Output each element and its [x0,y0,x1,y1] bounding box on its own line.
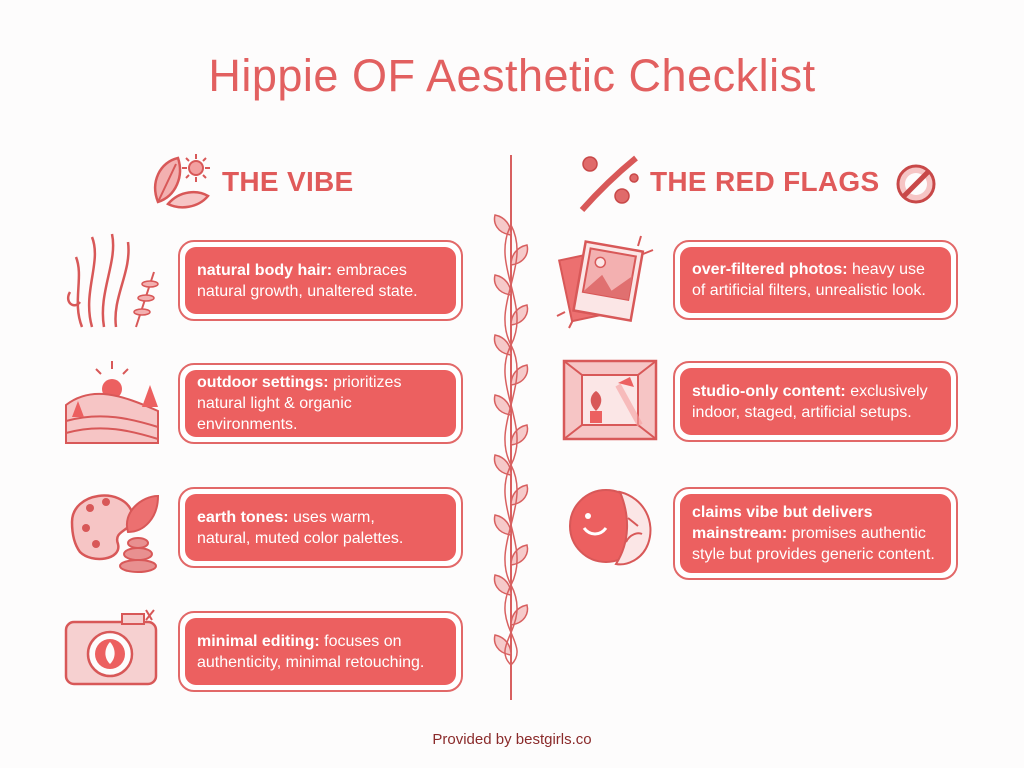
card: claims vibe but delivers mainstream: claims vibe but delivers mainstream: promises authentic style but provides generic content. [692,504,935,563]
card: earth tones: earth tones: uses warm, [197,508,375,526]
card: natural body hair: natural body hair: embraces natural growth, unaltered state. [197,262,418,300]
title: Hippie OF Aesthetic Checklist [208,50,816,101]
card: outdoor settings [178,363,463,444]
card: over-filtered photos [673,240,958,320]
icon: photos [556,236,654,328]
card: studio-only content [673,361,958,442]
card: claims vibe but delivers mainstream [673,487,958,580]
card: minimal editing: minimal editing: focuses on authenticity, minimal retouching. [197,632,424,670]
icon: thorny branch [580,156,639,212]
icon: body hair [66,234,159,328]
card: studio-only content: studio-only content: exclusively indoor, staged, artificial setups. [692,382,928,420]
icon: palette and stones [70,494,159,573]
card: earth tones [178,487,463,568]
footer: Provided by bestgirls.co [432,731,592,748]
icon: prohibited [896,164,936,204]
icon: outdoor hills [65,361,159,444]
icon: leaf and sun [154,154,210,209]
icon: mask face [569,489,652,566]
card: outdoor settings: outdoor settings: prioritizes natural light & organic environments. [197,374,401,433]
card: earth tones: natural, muted color palettes. [197,530,403,546]
icon: studio box [562,360,658,440]
card: over-filtered photos: over-filtered photos: heavy use of artificial filters, unrealistic look. [692,261,926,299]
heading: the vibe: THE VIBE [222,166,354,197]
card: natural body hair [178,240,463,321]
divider vine [494,155,528,700]
card: minimal editing [178,611,463,692]
icon: camera [64,609,158,686]
heading: the red flags: THE RED FLAGS [650,166,879,197]
